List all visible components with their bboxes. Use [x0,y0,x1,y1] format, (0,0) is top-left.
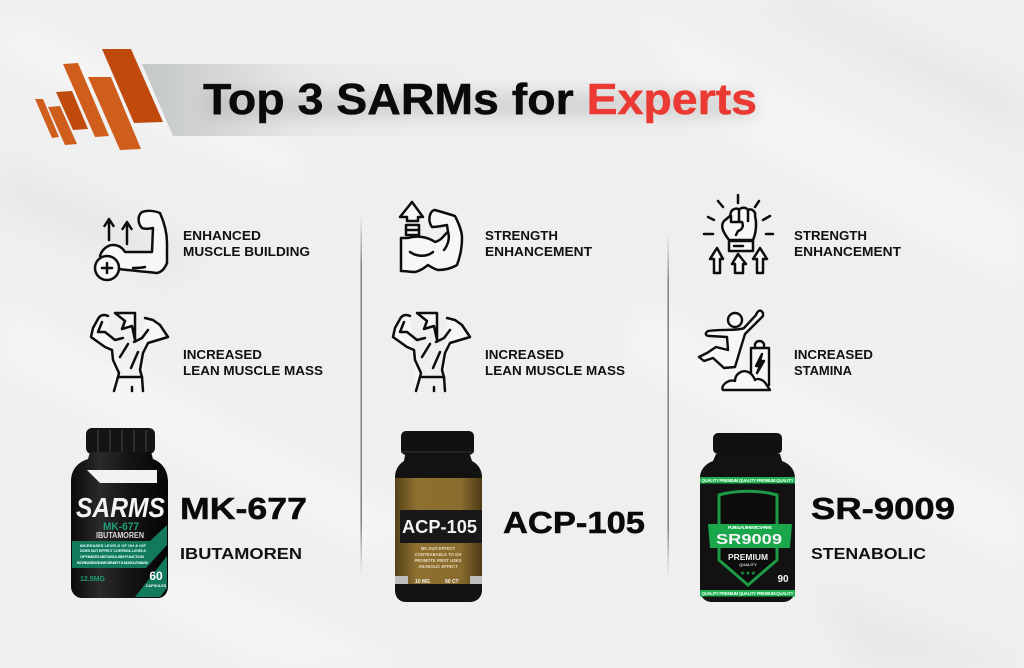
icon: raised fist with arrows [704,195,773,273]
name: SR-9009: SR-9009 [811,491,955,526]
bottle: ACP-105: ANABOLIC EFFECT [418,564,458,569]
icon: bicep with up arrow [400,202,462,272]
bottle: SR-9009: QUALITY [739,562,757,567]
bottle: SR-9009: PREMIUM [728,553,768,562]
benefit text: strength enhancement: ENHANCEMENT [485,245,592,259]
divider 1 [360,212,362,577]
icon: flexed arm with plus [95,211,167,280]
benefit text: strength enhancement: ENHANCEMENT [794,245,901,259]
bottle: ACP-105: ACP-105 [402,517,477,537]
bottle: ACP-105 [395,431,482,602]
benefit text: enhanced muscle building: ENHANCED [183,229,261,243]
bottle: MK-677: INCREASES BONE DENSITY & MUSCLE MASS [77,560,148,565]
divider 2 [668,232,669,577]
column 1 [71,211,323,598]
bottle: SR-9009: PURE & AUTHENTIC SARMS [728,525,772,530]
bottle: MK-677: OPTIMIZES METABOLISM FUNCTION [80,554,144,559]
benefit text: increased lean muscle mass: INCREASED [183,348,262,362]
bottle: MK-677: CAPSULES [146,584,167,588]
bottle: ACP-105: PROMOTE FIRST USES [414,558,462,563]
column 2 [393,202,645,602]
subname: Ibutamoren: IBUTAMOREN [180,546,302,563]
bottle: ACP-105: MK DUO EFFECT [421,546,456,551]
benefit text: increased stamina: INCREASED [794,348,873,362]
bottle: MK-677: SARMS [76,492,165,523]
bottle: MK-677 [71,428,168,598]
column 3 [699,195,955,602]
benefit text: enhanced muscle building: MUSCLE BUILDING [183,245,310,259]
bottle: ACP-105: 90 CT [445,579,459,585]
icon: bodybuilder [393,313,470,391]
bottle: ACP-105: 10 MG [415,579,430,585]
bottle: SR-9009: SR9009 [716,531,782,548]
bottle: SR-9009: QUALITY PREMIUM QUALITY PREMIUM QUALITY [702,478,794,483]
bottle: MK-677: MK-677 [103,521,139,533]
benefit text: strength enhancement: STRENGTH [485,229,558,243]
bottle: MK-677: IBUTAMOREN [96,531,144,540]
bottle: MK-677: 60 [149,569,163,583]
subname: Stenabolic: STENABOLIC [811,546,926,563]
bottle: ACP-105: CONTRABABLE TO GH [415,552,461,557]
benefit text: increased lean muscle mass: LEAN MUSCLE MASS [183,364,323,378]
benefit text: increased lean muscle mass: LEAN MUSCLE MASS [485,364,625,378]
bottle: SR-9009 [700,433,795,602]
bottle: SR-9009: 90 [777,574,789,585]
benefit text: increased lean muscle mass: INCREASED [485,348,564,362]
bottle: SR-9009: ★★★ [740,570,756,577]
bottle: SR-9009: QUALITY PREMIUM QUALITY PREMIUM QUALITY [702,591,794,596]
icon: jumping figure with battery and cloud [699,311,770,390]
title banner [142,64,755,136]
bottle: MK-677: 12.5MG [80,576,105,583]
benefit text: strength enhancement: STRENGTH [794,229,867,243]
name: ACP-105: ACP-105 [503,505,645,540]
logo [35,49,163,150]
bottle: MK-677: DOES NOT EFFECT CORTISOL LEVELS [80,548,146,553]
bottle: MK-677: INCREASES LEVELS OF GH & IGF [80,543,147,548]
benefit text: increased stamina: STAMINA [794,364,852,378]
title: Top 3 SARMs for Experts [203,75,757,124]
name: MK-677: MK-677 [180,491,307,526]
icon: bodybuilder [91,313,168,391]
